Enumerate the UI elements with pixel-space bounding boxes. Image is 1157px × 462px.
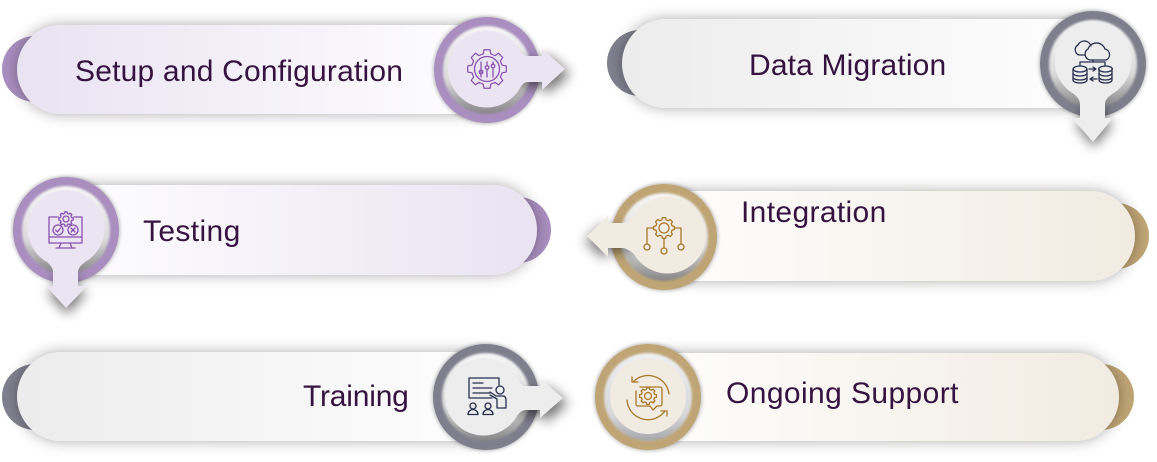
heading: Integration (741, 196, 887, 229)
pill (37, 185, 537, 275)
step: Setup and Configuration (2, 17, 570, 123)
arrow disc (448, 31, 565, 107)
arrow shadow (1074, 105, 1114, 147)
heading: Ongoing Support (726, 377, 959, 410)
pill (17, 25, 517, 114)
arrow shadow (518, 384, 568, 424)
arrow disc (445, 359, 563, 436)
step: Integration (585, 184, 1149, 290)
heading: Setup and Configuration (75, 55, 403, 88)
badge ring (433, 344, 539, 450)
badge ring (434, 17, 540, 123)
icon: clouds and databases (1073, 41, 1112, 83)
heading: Testing (143, 215, 241, 248)
arrow shadow (585, 222, 632, 261)
pill (622, 19, 1122, 108)
arrow disc (1054, 22, 1132, 142)
pill (635, 191, 1135, 281)
step: Ongoing Support (595, 344, 1134, 450)
icon: cycle with gear (627, 376, 669, 420)
heading: Data Migration (749, 49, 946, 82)
badge ring (611, 184, 717, 290)
back cap (607, 30, 673, 96)
icon: gear with sliders (468, 50, 506, 88)
arrow disc (27, 190, 105, 308)
back cap (1083, 203, 1149, 269)
step: Testing (13, 177, 551, 314)
badge ring (595, 344, 701, 450)
pill (619, 353, 1119, 441)
back cap (1068, 364, 1134, 430)
back cap (2, 36, 68, 102)
arrow shadow (46, 275, 88, 314)
heading: Training (303, 380, 409, 413)
badge ring (13, 177, 119, 283)
arrow disc (587, 197, 706, 273)
icon: gear network (644, 218, 684, 254)
icon: monitor with gear (49, 212, 82, 248)
badge disc (610, 358, 686, 434)
back cap (485, 197, 551, 263)
back cap (2, 364, 68, 430)
pill (17, 352, 517, 441)
step: Data Migration (607, 11, 1146, 147)
badge ring (1040, 11, 1146, 117)
icon: presenter and audience (468, 378, 506, 414)
step: Training (2, 344, 568, 450)
arrow shadow (520, 53, 570, 95)
